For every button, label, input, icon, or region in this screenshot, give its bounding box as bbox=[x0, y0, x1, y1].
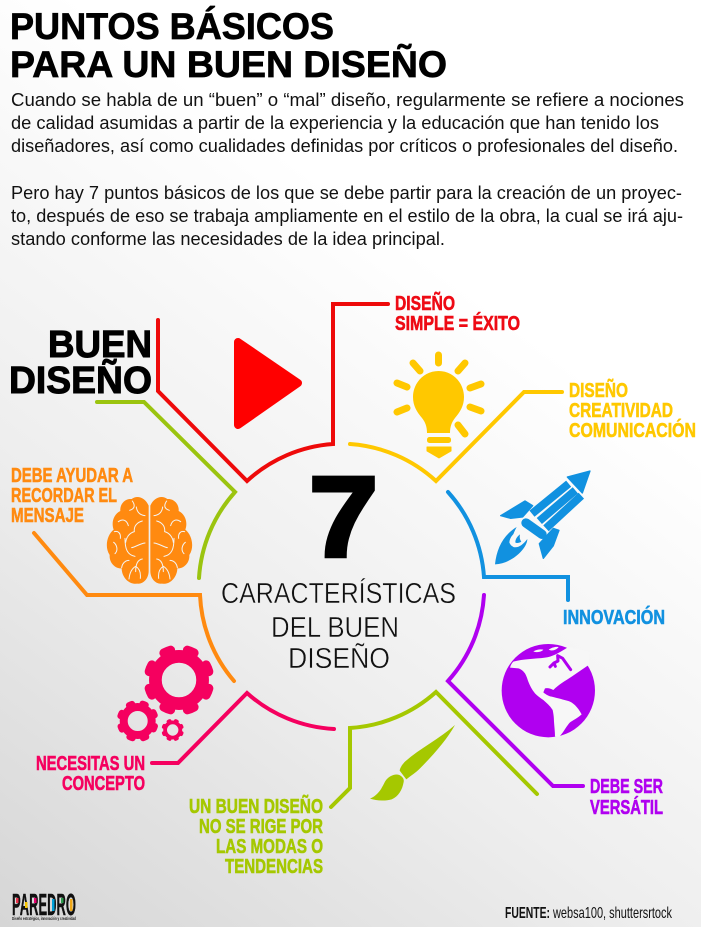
label: diseño creatividad comunicación bbox=[569, 379, 696, 442]
title bbox=[10, 6, 447, 85]
intro text block 2: to, después de eso se trabaja ampliamente en el estilo de la obra, la cual se irá aju- bbox=[11, 205, 683, 226]
connector: purple bbox=[448, 595, 583, 786]
title: PARA UN BUEN DISEÑO bbox=[10, 43, 447, 85]
connector: lime upper bbox=[97, 402, 235, 578]
center caption bbox=[221, 577, 456, 675]
label: diseño simple: DISEÑO bbox=[395, 292, 455, 315]
intro text block 1: de calidad asumidas a partir de la experiencia y la educación que han tenido los bbox=[11, 112, 659, 133]
icon: gears bbox=[120, 649, 210, 740]
connector: yellow bbox=[350, 392, 562, 481]
heading: buen diseño: BUEN bbox=[48, 324, 152, 366]
heading: buen diseño bbox=[9, 324, 152, 402]
icon: globe bbox=[502, 644, 595, 737]
label: debe ser versátil: VERSÁTIL bbox=[590, 796, 663, 819]
source credit: FUENTE: bbox=[505, 905, 550, 922]
center caption: DEL BUEN bbox=[271, 612, 399, 644]
label: no se rige por modas: NO SE RIGE POR bbox=[199, 815, 323, 838]
label: debe ayudar a recordar bbox=[11, 464, 133, 527]
label: diseño creatividad comunicación: DISEÑO bbox=[569, 379, 628, 402]
label: debe ayudar a recordar: RECORDAR EL bbox=[11, 484, 117, 507]
icon: brain bbox=[107, 497, 192, 584]
label: no se rige por modas: UN BUEN DISEÑO bbox=[189, 795, 323, 818]
label: no se rige por modas bbox=[189, 795, 323, 878]
icon: light bulb bbox=[397, 355, 481, 458]
intro text block 1: Cuando se habla de un “buen” o “mal” diseño, regularmente se refiere a nociones bbox=[11, 89, 684, 110]
label: diseño simple bbox=[395, 292, 520, 335]
icon: rocket bbox=[495, 471, 590, 564]
icon: play triangle bbox=[238, 342, 298, 425]
icon: paint brush bbox=[370, 725, 455, 801]
text: PAREDRO bbox=[12, 887, 76, 922]
intro text block 2: Pero hay 7 puntos básicos de los que se debe partir para la creación de un proyec- bbox=[11, 182, 682, 203]
label: debe ser versátil: DEBE SER bbox=[590, 775, 663, 798]
label: innovación: INNOVACIÓN bbox=[563, 605, 665, 629]
connector: orange bbox=[34, 533, 234, 681]
label: debe ser versátil bbox=[590, 775, 663, 819]
label: necesitas un concepto bbox=[36, 752, 145, 795]
intro text block 2 bbox=[11, 182, 683, 249]
big number 7: 7 bbox=[309, 454, 378, 581]
intro text block 1 bbox=[11, 89, 684, 156]
center caption: DISEÑO bbox=[288, 641, 390, 675]
title: PUNTOS BÁSICOS bbox=[10, 6, 334, 47]
label: necesitas un concepto: NECESITAS UN bbox=[36, 752, 145, 775]
logo: paredro bbox=[12, 887, 76, 922]
label: necesitas un concepto: CONCEPTO bbox=[62, 772, 145, 795]
label: debe ayudar a recordar: MENSAJE bbox=[11, 504, 84, 527]
connector: lime lower bbox=[331, 692, 537, 807]
connector: blue bbox=[448, 492, 568, 600]
intro text block 1: diseñadores, así como cualidades definidas por críticos o profesionales del diseño. bbox=[11, 135, 678, 156]
label: debe ayudar a recordar: DEBE AYUDAR A bbox=[11, 464, 133, 487]
label: no se rige por modas: LAS MODAS O bbox=[216, 835, 323, 858]
connector: red bbox=[158, 304, 388, 481]
label: no se rige por modas: TENDENCIAS bbox=[225, 855, 323, 878]
heading: buen diseño: DISEÑO bbox=[9, 358, 152, 402]
label: diseño simple: SIMPLE = ÉXITO bbox=[395, 312, 520, 335]
intro text block 2: stando conforme las necesidades de la idea principal. bbox=[11, 228, 445, 249]
center caption: CARACTERÍSTICAS bbox=[221, 577, 456, 610]
logo: paredro: Diseño estratégico, innovación y creatividad bbox=[12, 916, 76, 921]
connector: pink bbox=[152, 693, 334, 763]
